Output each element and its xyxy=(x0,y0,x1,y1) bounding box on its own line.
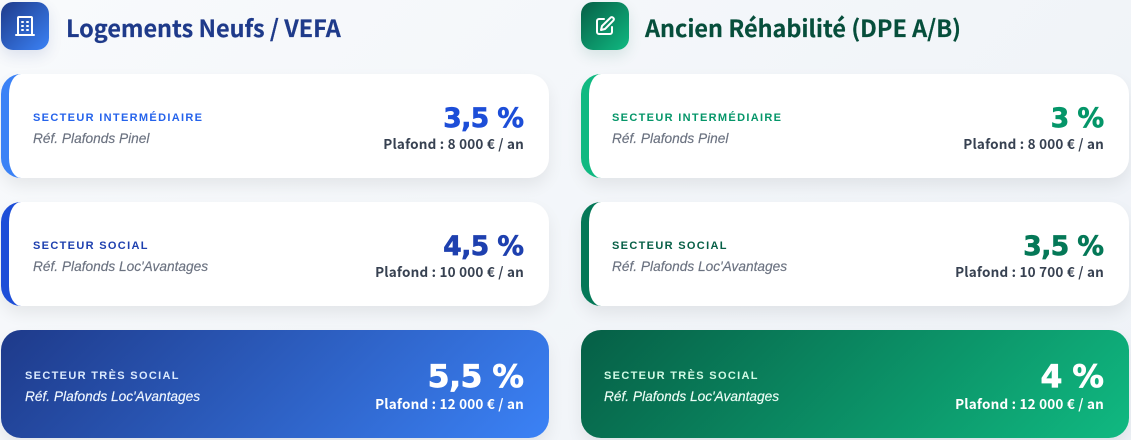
label: SECTEUR INTERMÉDIAIRE xyxy=(612,112,782,124)
reference: Réf. Plafonds Loc'Avantages xyxy=(612,259,787,274)
ceiling: Plafond : 12 000 € / an xyxy=(955,393,1104,413)
rate: 4 % xyxy=(1041,359,1104,395)
label: SECTEUR TRÈS SOCIAL xyxy=(604,370,759,382)
ceiling: Plafond : 10 000 € / an xyxy=(375,261,524,281)
card: secteur social xyxy=(1,202,549,306)
card: secteur intermédiaire xyxy=(581,74,1129,178)
rate: 3,5 % xyxy=(443,103,524,134)
ceiling: Plafond : 8 000 € / an xyxy=(383,133,524,153)
reference: Réf. Plafonds Loc'Avantages xyxy=(33,259,208,274)
reference: Réf. Plafonds Loc'Avantages xyxy=(25,389,200,404)
ceiling: Plafond : 10 700 € / an xyxy=(955,261,1104,281)
icon: edit xyxy=(581,2,629,50)
label: SECTEUR SOCIAL xyxy=(33,240,149,252)
card: secteur très social xyxy=(581,330,1129,438)
label: SECTEUR INTERMÉDIAIRE xyxy=(33,112,203,124)
card: secteur social xyxy=(581,202,1129,306)
reference: Réf. Plafonds Pinel xyxy=(33,131,149,146)
rate: 5,5 % xyxy=(428,359,524,395)
heading: Ancien Réhabilité: Ancien Réhabilité (DPE A/B) xyxy=(645,10,961,44)
rate: 3,5 % xyxy=(1023,231,1104,262)
rate: 3 % xyxy=(1051,103,1104,134)
heading: Logements Neufs / VEFA: Logements Neufs / VEFA xyxy=(66,10,341,44)
label: SECTEUR TRÈS SOCIAL xyxy=(25,370,180,382)
reference: Réf. Plafonds Loc'Avantages xyxy=(604,389,779,404)
icon: building xyxy=(1,2,49,50)
card: secteur très social xyxy=(1,330,549,438)
card: secteur intermédiaire xyxy=(1,74,549,178)
label: SECTEUR SOCIAL xyxy=(612,240,728,252)
reference: Réf. Plafonds Pinel xyxy=(612,131,728,146)
ceiling: Plafond : 12 000 € / an xyxy=(375,393,524,413)
rate: 4,5 % xyxy=(443,231,524,262)
ceiling: Plafond : 8 000 € / an xyxy=(963,133,1104,153)
